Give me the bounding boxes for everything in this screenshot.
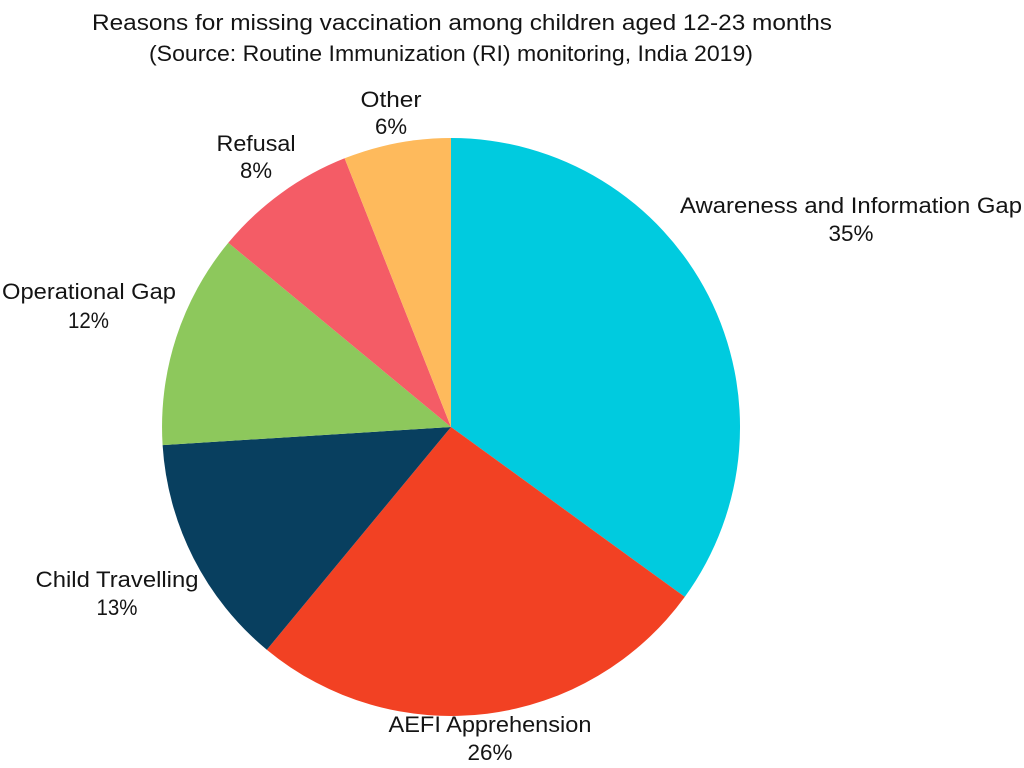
label: Other: 6% bbox=[375, 114, 407, 139]
label: Refusal: 8% bbox=[240, 158, 272, 183]
label: Other bbox=[360, 87, 422, 139]
pie chart bbox=[162, 138, 740, 716]
label: Child Travelling: Child Travelling bbox=[36, 567, 198, 592]
slice: Operational Gap 12% bbox=[162, 243, 451, 445]
title bbox=[92, 10, 832, 66]
label: Operational Gap bbox=[2, 279, 176, 333]
label: Refusal bbox=[216, 131, 296, 183]
label: Operational Gap: 12% bbox=[68, 308, 109, 333]
slice: AEFI Apprehension 26% bbox=[267, 427, 685, 716]
label: Other: Other bbox=[360, 87, 422, 112]
label: Refusal: Refusal bbox=[216, 131, 296, 156]
label: Child Travelling bbox=[36, 567, 198, 620]
slice: Other 6% bbox=[345, 138, 451, 427]
slice: Awareness and Information Gap 35% bbox=[451, 138, 740, 597]
slice: Refusal 8% bbox=[228, 158, 451, 427]
slice: Child Travelling 13% bbox=[163, 427, 451, 650]
label: Child Travelling: 13% bbox=[96, 595, 138, 620]
title: (Source: Routine Immunization (RI) monitoring, India 2019) bbox=[149, 41, 753, 66]
label: Awareness and Information Gap bbox=[680, 193, 1022, 246]
label: AEFI Apprehension bbox=[388, 712, 592, 765]
label: Awareness and Information Gap: 35% bbox=[828, 221, 874, 246]
label: Awareness and Information Gap: Awareness and Information Gap bbox=[680, 193, 1022, 218]
label: Operational Gap: Operational Gap bbox=[2, 279, 176, 304]
label: AEFI Apprehension: AEFI Apprehension bbox=[388, 712, 592, 737]
title: Reasons for missing vaccination among children aged 12-23 months bbox=[92, 10, 832, 35]
label: AEFI Apprehension: 26% bbox=[468, 740, 512, 765]
